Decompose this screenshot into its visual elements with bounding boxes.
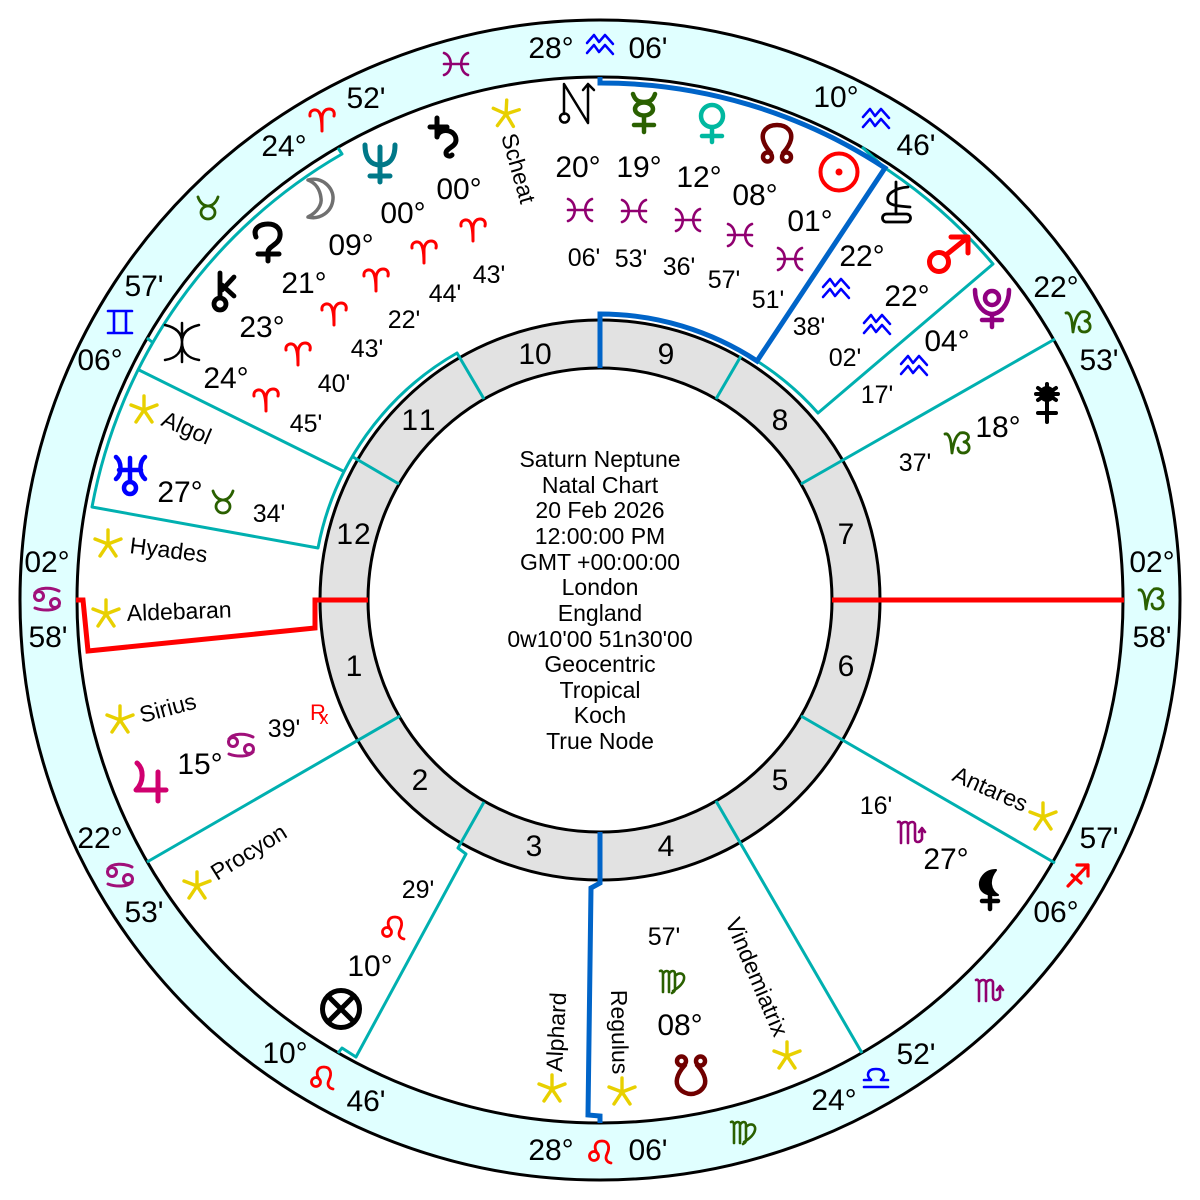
fixed star: Regulus: Regulus	[606, 990, 633, 1074]
teal house cusp lines	[92, 147, 1055, 1057]
fixed star: Sirius	[107, 688, 199, 732]
chart details text: Saturn Neptune	[519, 446, 681, 472]
planet: 09 Aries 22	[328, 229, 420, 334]
cusp label: bottom 28 Leo 06	[528, 1134, 668, 1167]
chart details text: Natal Chart	[542, 472, 659, 498]
ring sign: Virgo	[731, 1122, 755, 1144]
cusp label: 22 Cancer 53	[77, 822, 164, 929]
planet: 00 Aries 43: 00°	[436, 173, 482, 206]
planet: 01 Pisces 51: 51'	[752, 286, 784, 314]
fixed star: Antares: Antares	[949, 761, 1032, 817]
planet: 09 Aries 22: 22'	[388, 306, 420, 334]
planet: 04 Aquarius 17	[861, 325, 970, 409]
planet: Jupiter 15 Cancer 39 retrograde: 15°	[177, 748, 223, 781]
planet glyph: black star over cross	[1036, 384, 1058, 422]
house numbers: 6	[838, 650, 854, 683]
planet: 12 Pisces 36: 36'	[663, 253, 695, 281]
cusp label: 10 Aquarius 46: 46'	[896, 129, 936, 162]
house numbers: 1	[346, 650, 362, 683]
cusp label: 22 Cancer 53: 22°	[77, 822, 123, 855]
planet: 21 Aries 43: 21°	[281, 267, 327, 300]
chart details text: London	[562, 574, 638, 600]
fixed star: Procyon: Procyon	[206, 818, 291, 885]
planet: south node 08 Virgo 57	[648, 923, 705, 1094]
planet: Lilith 27 Scorpio 16: 16'	[860, 792, 892, 820]
cusp label: 10 Leo 46: 46'	[346, 1085, 386, 1118]
planet: 22 Aquarius 02: 02'	[829, 344, 861, 372]
planet glyph: black asteroid hook and cross	[255, 224, 280, 261]
house numbers: 4	[658, 830, 674, 863]
planet glyph: black crossed arcs	[165, 323, 199, 362]
planet: 23 Aries 40	[239, 311, 350, 398]
cusp label: 06 Sagittarius 57	[1033, 822, 1119, 929]
planet: 23 Aries 40: 40'	[318, 370, 350, 398]
planet: 08 Pisces 57	[708, 179, 778, 294]
house ring	[320, 320, 880, 880]
planet glyph: green Mercury	[633, 94, 655, 132]
ring sign: Scorpio	[976, 980, 1003, 1001]
chart details text: Geocentric	[544, 651, 656, 677]
cusp label: 24 Aries 52	[261, 82, 386, 163]
fixed star: Alphard: Alphard	[541, 992, 571, 1072]
fixed star: Alphard	[539, 992, 571, 1101]
planet: 09 Aries 22: 09°	[328, 229, 374, 262]
cusp label: 10 Aquarius 46: 10°	[813, 81, 859, 114]
chart details text: True Node	[546, 728, 654, 754]
planet: 21 Aries 43	[281, 267, 383, 363]
planet: Jupiter 15 Cancer 39 retrograde: x	[320, 708, 328, 728]
cusp label: 24 Libra 52: 24°	[811, 1084, 857, 1117]
planet: 00 Aries 43: 43'	[473, 261, 505, 289]
planet glyph: Venus	[701, 105, 723, 142]
cusp label: 24 Aries 52: 24°	[261, 130, 307, 163]
cusp label: 10 Aquarius 46	[813, 81, 936, 162]
planet: Jupiter 15 Cancer 39 retrograde	[136, 700, 328, 801]
planet: 22 Aquarius 02	[829, 280, 930, 372]
house numbers: 5	[772, 764, 788, 797]
fixed star: Aldebaran: Aldebaran	[126, 596, 232, 626]
planet: 12 Pisces 36: 12°	[676, 161, 722, 194]
fixed star: Sirius: Sirius	[137, 688, 199, 728]
planet: 01 Pisces 51: 01°	[787, 205, 833, 238]
planet: 00 Aries 44: 00°	[380, 197, 426, 230]
fixed star: Algol: Algol	[158, 406, 215, 450]
cusp label: 10 Leo 46	[262, 1037, 386, 1118]
planet glyph: Saturn	[430, 118, 456, 156]
cusp label: 24 Aries 52: 52'	[346, 82, 386, 115]
planet: 04 Aquarius 17: 04°	[924, 325, 970, 358]
fixed star: Hyades: Hyades	[128, 532, 209, 567]
planet: 23 Aries 40: 23°	[239, 311, 285, 344]
cusp label: top 28 Aquarius 06	[528, 32, 668, 65]
planet: south node 08 Virgo 57: 08°	[657, 1009, 703, 1042]
chart details text: GMT +00:00:00	[520, 549, 680, 575]
planet: Part of Fortune 10 Leo 29	[322, 876, 434, 1028]
house numbers: 2	[412, 764, 428, 797]
fixed star: Procyon	[184, 818, 291, 898]
planet: north node marker N	[560, 84, 594, 123]
cusp label: 24 Libra 52	[811, 1038, 936, 1117]
chart details text: 20 Feb 2026	[535, 497, 665, 523]
fixed star: Algol	[131, 396, 215, 450]
planet: 24 Aries 45: 45'	[290, 410, 322, 438]
cusp label: 06 Sagittarius 57: 57'	[1079, 822, 1119, 855]
planet glyph: Pluto	[975, 290, 1009, 327]
planet: 00 Aries 43	[436, 173, 505, 289]
house numbers: 11	[401, 404, 439, 437]
planet: 12 Pisces 36	[663, 161, 722, 281]
cusp label: 02 Cancer 58	[24, 546, 70, 654]
cusp label: 22 Capricorn 53: 53'	[1079, 344, 1119, 377]
planet: 01 Pisces 51	[752, 205, 833, 314]
planet: 21 Aries 43: 43'	[351, 335, 383, 363]
planet: 20 Pisces 06: 06'	[568, 244, 600, 272]
planet glyph: Moon	[308, 179, 333, 218]
cusp label: 02 Cancer 58: 02°	[24, 546, 70, 579]
planet: Part of Fortune 10 Leo 29: 10°	[347, 950, 393, 983]
planet: 24 Aries 45: 24°	[203, 362, 249, 395]
planet: 22 Aquarius 02: 22°	[884, 280, 930, 313]
planet glyph: Chiron	[214, 273, 234, 310]
chart details text: 0w10'00 51n30'00	[507, 626, 693, 652]
planet: 19 Pisces 53: 53'	[615, 245, 647, 273]
chart details text: Tropical	[560, 677, 640, 703]
planet: 22 Aquarius 38: 22°	[839, 240, 885, 273]
planet glyph: north node	[763, 125, 791, 162]
chart details text: Koch	[574, 702, 626, 728]
planet: 22 Aquarius 38: 38'	[793, 313, 825, 341]
cusp label: 22 Capricorn 53: 22°	[1033, 271, 1079, 304]
planet: Lilith 27 Scorpio 16	[860, 792, 998, 909]
planet glyph: black hook asteroid	[882, 182, 910, 222]
house numbers: 3	[526, 830, 542, 863]
planet glyph: Mars	[930, 237, 968, 272]
planet: 20 Pisces 06	[555, 151, 601, 272]
chart details text: 12:00:00 PM	[535, 523, 665, 549]
planet: 18 Capricorn 37: 37'	[899, 449, 931, 477]
planet: 19 Pisces 53: 19°	[616, 151, 662, 184]
house numbers	[336, 338, 854, 863]
planet: 18 Capricorn 37: 18°	[975, 411, 1021, 444]
cusp label: 02 Capricorn 58	[1129, 546, 1175, 654]
cusp label: bottom 28 Leo 06: 06'	[628, 1134, 668, 1167]
cusp label: top 28 Aquarius 06: 06'	[628, 32, 668, 65]
fixed star: Scheat: Scheat	[496, 130, 541, 207]
cusp label: bottom 28 Leo 06: 28°	[528, 1134, 574, 1167]
planet: Jupiter 15 Cancer 39 retrograde: R	[310, 700, 326, 725]
fixed star: Hyades	[95, 530, 209, 567]
planet: 00 Aries 44	[380, 197, 461, 308]
planet: Uranus 27 Taurus 34	[116, 457, 285, 528]
planet: Part of Fortune 10 Leo 29: 29'	[402, 876, 434, 904]
planet: 08 Pisces 57: 57'	[708, 266, 740, 294]
cusp label: 06 Gemini 57: 06°	[77, 344, 123, 377]
fixed star: Antares	[949, 761, 1056, 829]
cusp label: 06 Sagittarius 57: 06°	[1033, 896, 1079, 929]
planet glyph: Neptune	[365, 145, 395, 182]
planet: 00 Aries 44: 44'	[429, 280, 461, 308]
cusp label: 02 Capricorn 58: 58'	[1132, 621, 1172, 654]
cusp label: 22 Cancer 53: 53'	[124, 896, 164, 929]
planet: Uranus 27 Taurus 34: 34'	[253, 500, 285, 528]
cusp label: 06 Gemini 57	[77, 270, 164, 377]
house numbers: 8	[772, 404, 788, 437]
house numbers: 12	[336, 518, 372, 551]
planet glyph: Sun	[820, 154, 858, 190]
house numbers: 7	[838, 518, 854, 551]
planet: Jupiter 15 Cancer 39 retrograde: 39'	[268, 715, 300, 743]
planet: 08 Pisces 57: 08°	[732, 179, 778, 212]
planet: 20 Pisces 06: 20°	[555, 151, 601, 184]
cusp label: top 28 Aquarius 06: 28°	[528, 32, 574, 65]
planet: Uranus 27 Taurus 34: 27°	[157, 476, 203, 509]
house numbers: 9	[658, 338, 674, 371]
cusp label: 22 Capricorn 53	[1033, 271, 1119, 377]
red ascendant axis	[76, 600, 1124, 651]
planet: 19 Pisces 53	[615, 151, 662, 273]
cusp label: 02 Capricorn 58: 02°	[1129, 546, 1175, 579]
planet: 22 Aquarius 38	[793, 240, 885, 341]
cusp label: 02 Cancer 58: 58'	[28, 621, 68, 654]
house numbers: 10	[518, 338, 552, 371]
ring sign: Pisces	[444, 53, 468, 75]
blue midheaven axis	[588, 77, 885, 1123]
planet: 24 Aries 45	[203, 362, 322, 438]
planet: 18 Capricorn 37	[899, 411, 1021, 477]
fixed star: Vindemiatrix: Vindemiatrix	[720, 914, 794, 1041]
planet: 04 Aquarius 17: 17'	[861, 381, 893, 409]
cusp label: 24 Libra 52: 52'	[896, 1038, 936, 1071]
chart details text	[507, 446, 693, 754]
ring sign: Taurus	[198, 197, 218, 219]
planet: south node 08 Virgo 57: 57'	[648, 923, 680, 951]
fixed star: Scheat	[492, 99, 541, 207]
chart details text: England	[558, 600, 642, 626]
planet: Lilith 27 Scorpio 16: 27°	[923, 843, 969, 876]
cusp label: 10 Leo 46: 10°	[262, 1037, 308, 1070]
cusp label: 06 Gemini 57: 57'	[124, 270, 164, 303]
